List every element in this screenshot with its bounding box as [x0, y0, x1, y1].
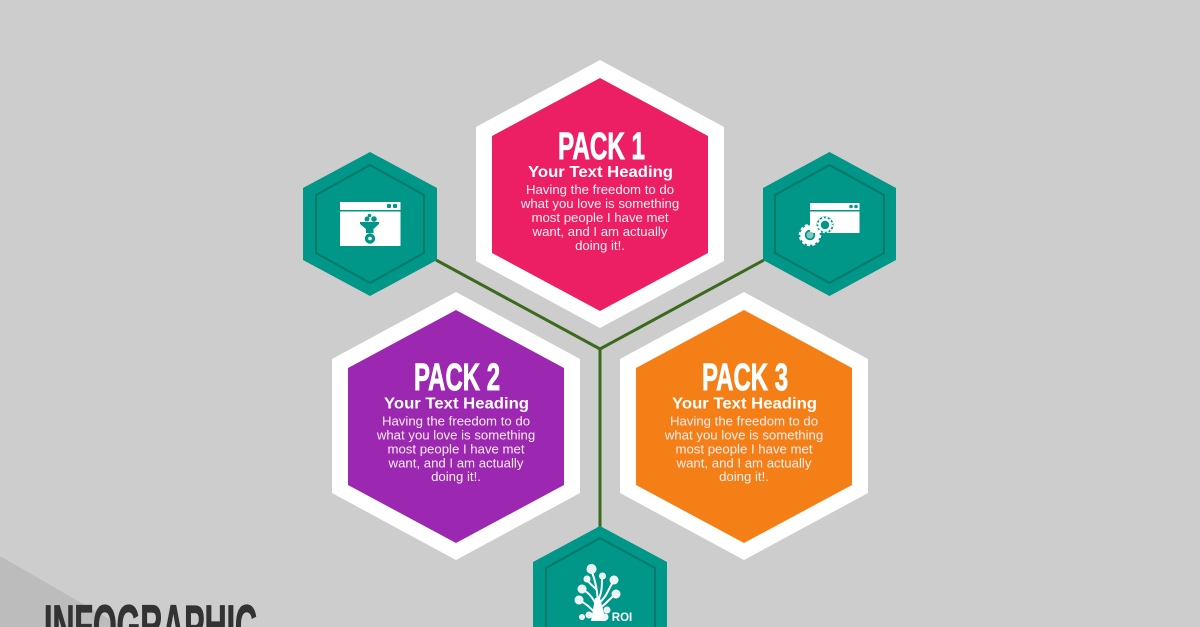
- pack 2 body text: doing it!.: [431, 469, 481, 484]
- pack 3 body text: [664, 414, 823, 484]
- pack 3 body text: most people I have met: [675, 442, 813, 456]
- corner triangle: [0, 556, 123, 627]
- connector lines: [436, 260, 764, 527]
- pack 2 body text: what you love is something: [376, 428, 535, 442]
- pack 3 body text: doing it!.: [719, 469, 769, 484]
- icon: ROI money tree: ROI: [612, 612, 632, 624]
- pack 3 heading: PACK 3: [702, 357, 788, 399]
- pack 2 body text: most people I have met: [387, 442, 525, 456]
- panel: pack 2: [332, 292, 580, 560]
- pack 1 body text: Having the freedom to do: [526, 182, 674, 197]
- pack 1 body text: what you love is something: [520, 196, 679, 211]
- pack 1 heading: PACK 1: [558, 126, 645, 168]
- panel: pack 3: [620, 292, 868, 560]
- pack 3 subheading: Your Text Heading: [672, 396, 817, 412]
- pack 2 body text: want, and I am actually: [388, 456, 524, 470]
- pack 1 body text: [520, 182, 679, 253]
- pack 3 body text: what you love is something: [664, 428, 823, 442]
- icon: funnel in browser window: [303, 152, 437, 296]
- pack 1 body text: want, and I am actually: [532, 224, 668, 239]
- pack 2 body text: Having the freedom to do: [382, 414, 530, 428]
- pack 3 body text: want, and I am actually: [676, 456, 812, 470]
- pack 1 body text: doing it!.: [575, 238, 625, 253]
- icon: ROI money tree: [533, 526, 667, 627]
- pack 1 body text: most people I have met: [531, 210, 669, 225]
- pack 1 subheading: Your Text Heading: [528, 164, 673, 181]
- pack 3 body text: Having the freedom to do: [670, 414, 818, 428]
- pack 2 body text: [376, 414, 535, 484]
- pack 2 heading: PACK 2: [414, 357, 500, 399]
- icon: gears in browser window: [763, 152, 896, 296]
- panel: pack 1: [476, 60, 724, 328]
- pack 2 subheading: Your Text Heading: [384, 396, 529, 412]
